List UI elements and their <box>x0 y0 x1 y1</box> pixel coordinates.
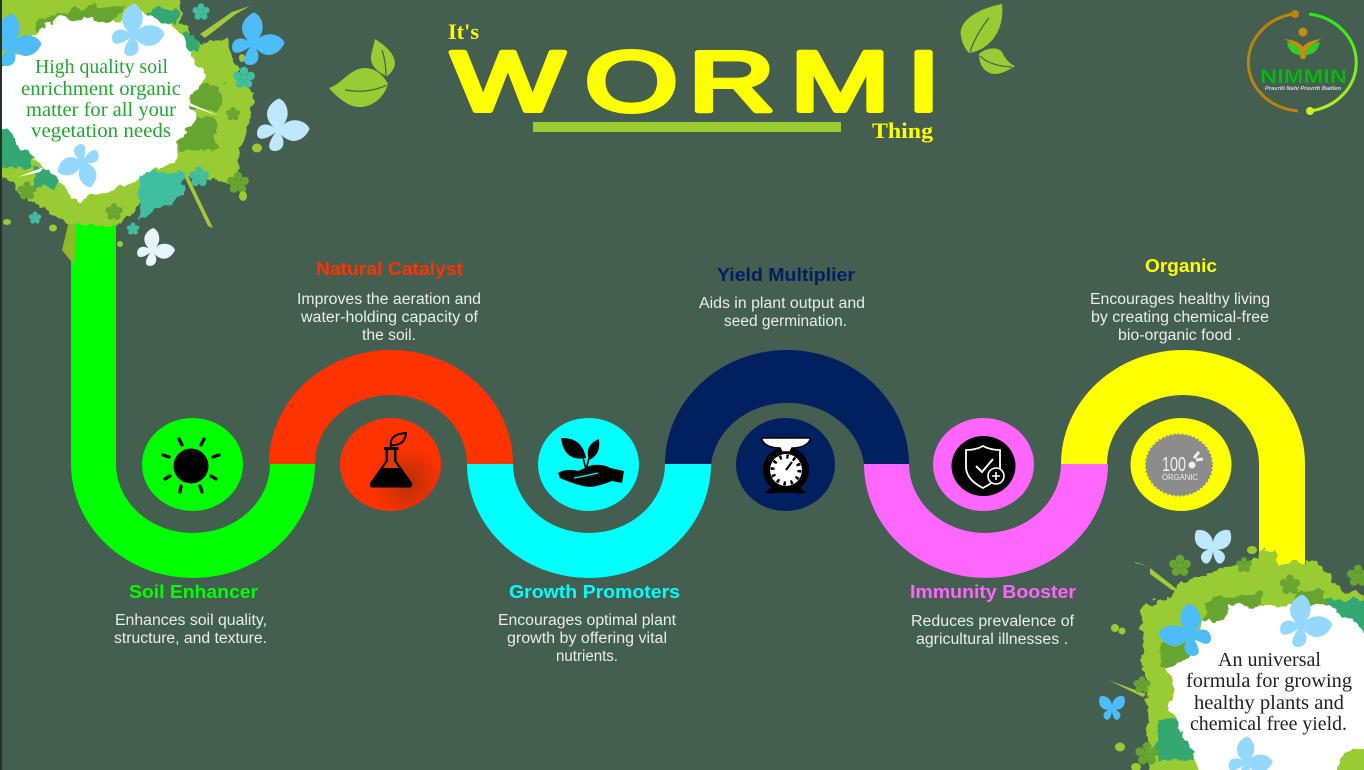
splash: top left <box>0 0 311 272</box>
text: bottom right callout: formula for growing <box>1186 670 1352 692</box>
step: Natural Catalyst <box>297 258 481 344</box>
flowers and dots <box>3 3 262 247</box>
icon: immunity booster shield <box>933 418 1034 511</box>
step: Yield Multiplier: seed germination. <box>724 313 847 330</box>
step: Immunity Booster: agricultural illnesses . <box>916 631 1068 648</box>
text: top left callout: High quality soil <box>35 56 168 78</box>
butterflies <box>0 2 311 272</box>
icon: 100 percent organic badge: 100 <box>1162 454 1186 476</box>
green splatter <box>0 0 255 226</box>
text: top left callout: vegetation needs <box>31 120 171 142</box>
winding path <box>71 222 1305 580</box>
icon: 100 percent organic badge <box>1130 418 1232 511</box>
logo: NIMMIN <box>1248 10 1356 115</box>
logo figure <box>1298 28 1308 36</box>
step: Immunity Booster <box>910 581 1076 648</box>
step: Yield Multiplier: Yield Multiplier <box>717 264 855 285</box>
step: Organic: Encourages healthy living <box>1090 291 1270 308</box>
text: top left callout: matter for all your <box>26 99 176 121</box>
step: Growth Promoters: Encourages optimal plant <box>498 612 677 629</box>
flowers and dots <box>1111 546 1364 770</box>
step: Growth Promoters: nutrients. <box>556 648 618 665</box>
green splatter <box>1140 550 1364 770</box>
step: Immunity Booster: Immunity Booster <box>910 581 1076 602</box>
step: Natural Catalyst: Improves the aeration and <box>297 291 481 308</box>
step: Natural Catalyst: the soil. <box>362 327 416 344</box>
step: Yield Multiplier: Aids in plant output and <box>699 295 865 312</box>
text: top left callout <box>21 56 181 142</box>
icon: soil enhancer sun <box>142 418 243 511</box>
icon: right leaves <box>961 4 1015 74</box>
segment: red <box>269 350 513 464</box>
title underline <box>533 122 841 132</box>
step: Soil Enhancer: structure, and texture. <box>114 630 267 647</box>
icon: natural catalyst flask <box>340 418 441 511</box>
text: bottom right callout: An universal <box>1218 649 1321 671</box>
logo wordmark: NIMMIN <box>1260 67 1347 88</box>
splash: bottom right <box>1099 530 1364 770</box>
title <box>448 19 940 143</box>
step: Soil Enhancer <box>114 581 267 647</box>
white blot <box>1168 603 1364 770</box>
text: bottom right callout <box>1186 649 1352 735</box>
title: Thing: Thing <box>872 118 933 143</box>
step: Organic: bio-organic food . <box>1118 327 1241 344</box>
step: Natural Catalyst: water-holding capacity of <box>300 309 479 326</box>
icon: 100 percent organic badge: ORGANIC <box>1162 473 1198 482</box>
step: Yield Multiplier <box>699 264 865 330</box>
logo tagline: Pravriti Nahi Pravriti Badlen <box>1265 86 1341 92</box>
icon: yield multiplier scale <box>736 418 835 511</box>
butterflies <box>1099 530 1334 770</box>
text: top left callout: enrichment organic <box>21 78 181 100</box>
step: Natural Catalyst: Natural Catalyst <box>316 258 463 279</box>
segment: magenta <box>864 464 1108 578</box>
white blot <box>0 12 207 203</box>
step: Soil Enhancer: Enhances soil quality, <box>115 612 267 629</box>
step: Organic: Organic <box>1145 255 1217 276</box>
twigs <box>1108 562 1178 697</box>
segment: yellow <box>1061 350 1305 580</box>
title: It's: It's <box>448 19 479 44</box>
step: Organic <box>1090 255 1270 344</box>
twigs <box>185 6 250 228</box>
text: bottom right callout: healthy plants and <box>1194 692 1344 714</box>
step: Growth Promoters <box>498 581 680 665</box>
olive drip <box>62 198 77 265</box>
segment: green <box>71 222 315 578</box>
step: Growth Promoters: Growth Promoters <box>509 581 680 602</box>
step: Organic: by creating chemical-free <box>1091 309 1269 326</box>
icon: growth promoter plant in hand <box>538 418 639 511</box>
title: WORMI: WORMI <box>452 35 940 128</box>
logo ring <box>1248 14 1298 111</box>
segment: navy <box>665 350 909 464</box>
step: Immunity Booster: Reduces prevalence of <box>911 613 1075 630</box>
text: bottom right callout: chemical free yield. <box>1190 713 1347 735</box>
icon: left leaves <box>329 39 395 107</box>
segment: cyan <box>467 464 711 578</box>
step: Growth Promoters: growth by offering vital <box>507 630 667 647</box>
step: Soil Enhancer: Soil Enhancer <box>129 581 258 602</box>
